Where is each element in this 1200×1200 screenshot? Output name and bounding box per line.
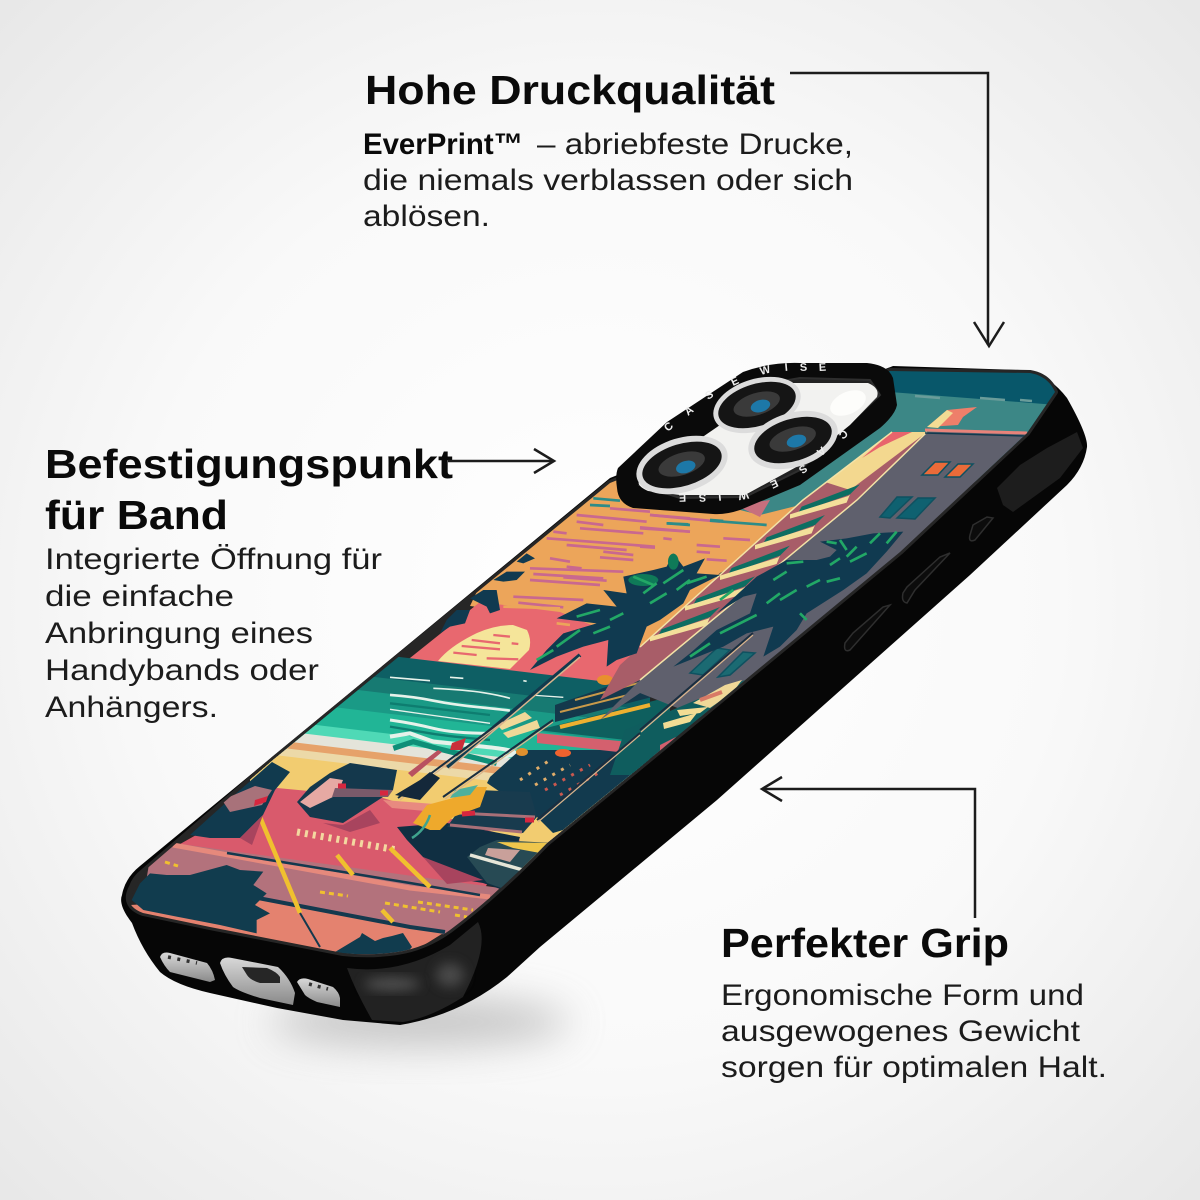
strap attachment recess (997, 432, 1083, 512)
sky streaks right (640, 515, 767, 561)
facade base (590, 420, 940, 720)
speaker holes (168, 957, 197, 963)
roof line (925, 430, 1027, 433)
text block: print quality (363, 128, 853, 233)
bush bottom right (336, 933, 412, 954)
facade with balconies (590, 420, 940, 720)
taxi lights and wheel (412, 785, 534, 838)
roof line shadow (925, 433, 1025, 436)
building windows (690, 462, 973, 677)
arrow: print quality to case (790, 73, 1004, 346)
yellow lane markings (165, 817, 473, 947)
ring lettering bottom: CASEWISE (679, 427, 850, 503)
phone case illustration (121, 340, 1100, 1025)
case body (121, 366, 1087, 1025)
bottom ports (160, 952, 340, 1007)
roof box (927, 407, 977, 427)
usb port opening (242, 967, 280, 983)
gold tangle lines (560, 682, 640, 713)
usb port surround (220, 958, 295, 1005)
top lens (706, 367, 808, 443)
text block: strap attachment: Integrierte Öffnung für (45, 543, 382, 576)
camera module (616, 362, 897, 514)
road lower stripes (130, 843, 500, 960)
pink small corner under camera (742, 500, 770, 517)
right lens (741, 401, 845, 479)
facade top pink (862, 432, 912, 458)
text block: strap attachment (45, 543, 382, 724)
cream signs right (660, 680, 742, 752)
palm bush bottom left (132, 865, 270, 933)
gold tangle (555, 680, 651, 722)
palm trunk left (447, 655, 580, 769)
left parked car (190, 762, 290, 845)
taxi bands (450, 813, 535, 832)
street block (487, 750, 660, 833)
left edge palm fronds (440, 553, 535, 633)
crowd specks (520, 760, 600, 795)
ring inner bevel (640, 378, 880, 498)
palm crown left (530, 553, 720, 670)
palm crown right fill (673, 532, 903, 667)
sun (438, 625, 530, 669)
text block: print quality: – abriebfeste Drucke, (537, 128, 853, 161)
sky dashes (915, 396, 1032, 401)
facade outlines (640, 432, 927, 680)
arrow: grip (762, 777, 975, 918)
palm green clusters (628, 574, 658, 586)
screen bezel (129, 371, 1055, 954)
palm tree left (530, 553, 720, 670)
ring lettering top: CASEWISE (662, 362, 826, 434)
side buttons (845, 517, 993, 651)
text block: print quality: die niemals verblassen oder sich (363, 164, 853, 197)
left speaker grille (160, 952, 215, 982)
dark teal sky (889, 371, 1055, 458)
palm highlights right (690, 532, 897, 657)
text block: grip: ausgewogenes Gewicht (721, 1015, 1081, 1048)
heading: Befestigungspunkt für Band (45, 441, 453, 538)
text block: grip: sorgen für optimalen Halt. (721, 1051, 1107, 1084)
cream signs left (497, 712, 540, 738)
road (173, 788, 520, 890)
sky streaks (503, 498, 723, 625)
text block: strap attachment: Anbringung eines (45, 617, 313, 650)
yellow roof line (560, 705, 650, 727)
street poles (398, 633, 753, 822)
facade upper cream (825, 432, 927, 490)
left lens (629, 425, 735, 505)
heading: Befestigungspunkt für Band: Befestigungspunkt (45, 441, 453, 487)
waves (390, 677, 563, 763)
right speaker holes (309, 984, 328, 989)
text block: strap attachment: Handybands oder (45, 654, 319, 687)
teal sky band (740, 392, 1047, 515)
text block: strap attachment: Anhängers. (45, 691, 218, 724)
lamps (516, 675, 613, 757)
roof box cream side (927, 410, 953, 428)
camera plate flash (826, 385, 870, 421)
heading: Perfekter Grip: Perfekter Grip (721, 920, 1009, 966)
street signs (395, 738, 466, 800)
cream car (467, 840, 548, 888)
road shadow below centre car (323, 810, 380, 832)
sand (250, 766, 266, 780)
taxi body (447, 790, 537, 833)
text block: grip: Ergonomische Form und (721, 979, 1084, 1012)
mauve taxi shadow (423, 857, 483, 884)
arrow: strap point (448, 449, 554, 473)
lower green block (610, 680, 745, 775)
taxi shadow (397, 823, 520, 890)
taxi yellow front (413, 787, 487, 830)
phone drop shadow (270, 998, 570, 1046)
text block: print quality: EverPrint™ (363, 128, 523, 161)
centre car (297, 763, 397, 823)
palm tree right (673, 532, 903, 667)
text block: print quality: ablösen. (363, 200, 490, 233)
balcony floors (650, 484, 860, 641)
road far kerb (383, 800, 432, 811)
camera ring (616, 363, 897, 514)
bottom corner highlight (347, 922, 482, 1022)
right speaker grille (297, 978, 340, 1007)
pink sky (410, 603, 640, 681)
white camera plate (639, 383, 878, 495)
orange sky (470, 480, 795, 646)
text block: strap attachment: die einfache (45, 580, 234, 613)
printed artwork (130, 340, 1100, 960)
heading: Hohe Druckqualität: Hohe Druckqualität (365, 67, 775, 113)
green roof block (540, 700, 670, 740)
sea bands (250, 639, 650, 870)
palm highlights left (537, 570, 707, 660)
text block: grip (721, 979, 1107, 1084)
sun stripes (453, 635, 518, 659)
main grey building (600, 432, 1040, 725)
pink awning band (537, 733, 667, 757)
palm green top (668, 554, 679, 570)
heading: Befestigungspunkt für Band: für Band (45, 492, 228, 538)
